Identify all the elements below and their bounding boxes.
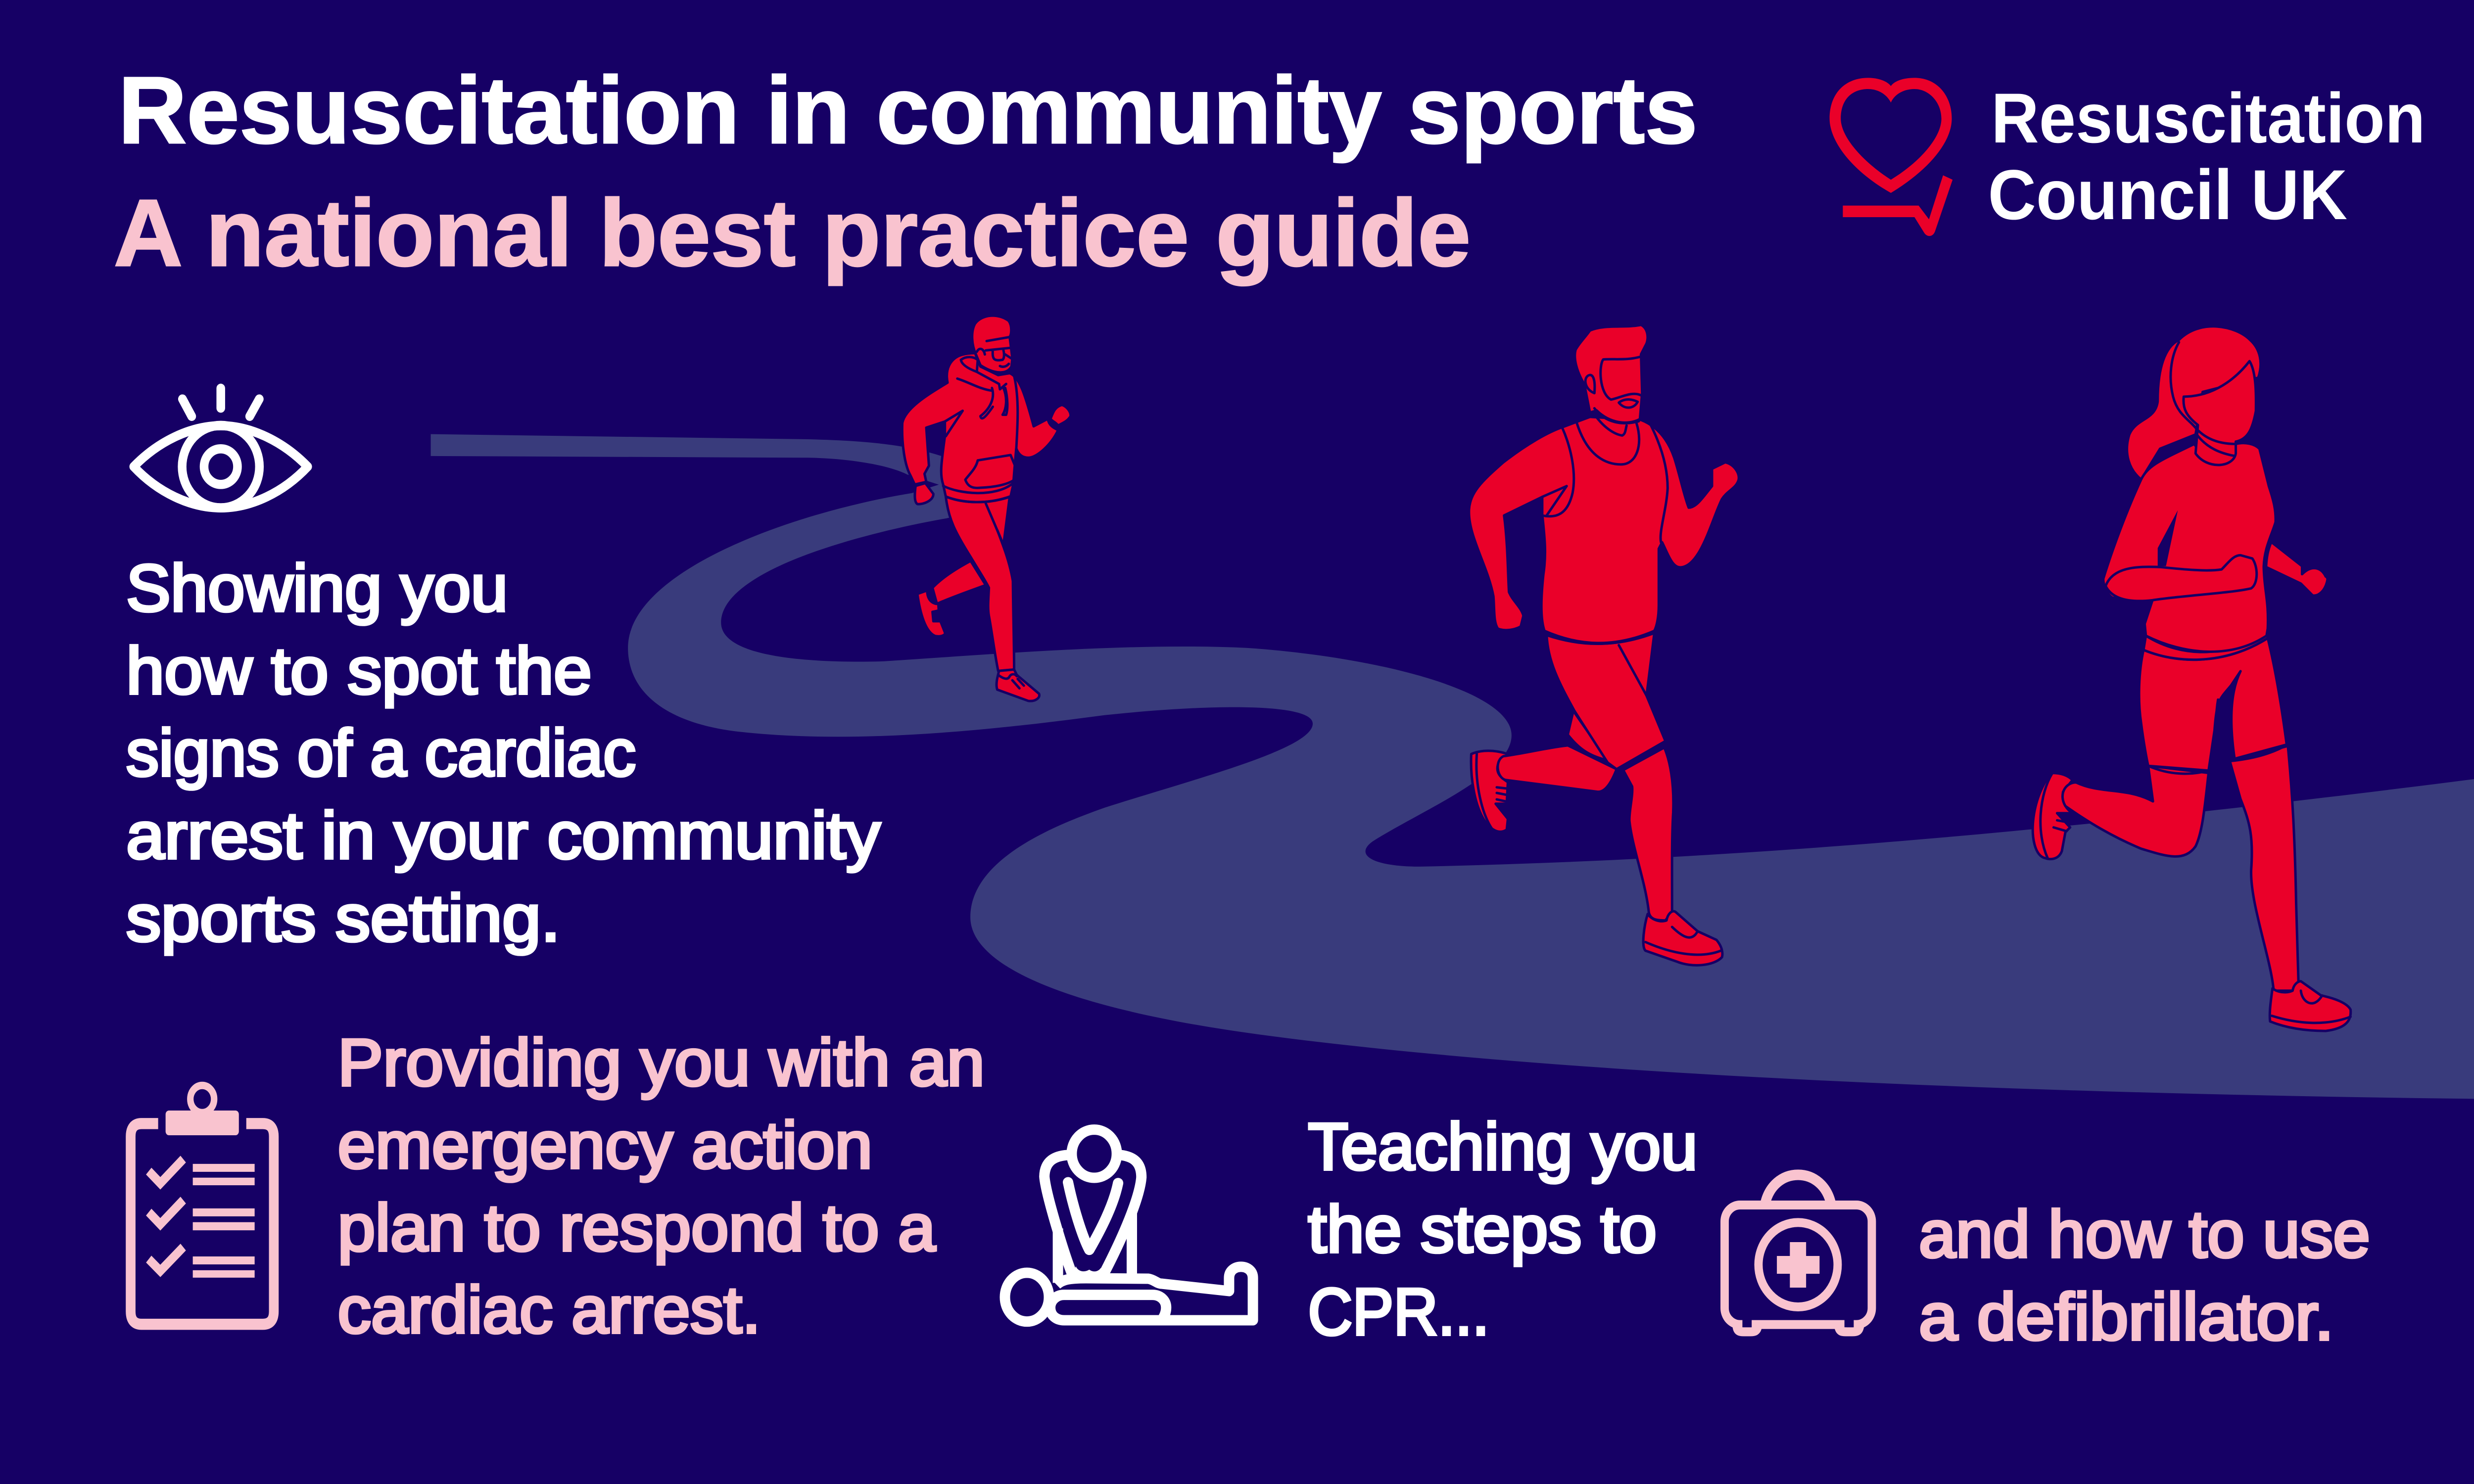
text block: teaching CPR: the steps to <box>1308 1192 1657 1266</box>
icon: clipboard checklist <box>131 1085 274 1324</box>
shorts <box>2139 638 2286 771</box>
underarm gap <box>2158 510 2178 566</box>
text block: emergency action plan: Providing you with an <box>337 1025 985 1100</box>
back shoe <box>1471 751 1508 832</box>
front shoe <box>1643 911 1722 965</box>
text block: spot the signs: how to spot the <box>126 633 592 708</box>
text block: use a defibrillator: and how to use <box>1919 1197 2370 1271</box>
title: Resuscitation in community sports <box>118 58 1698 163</box>
back arm <box>2266 542 2328 596</box>
icon: defibrillator kit <box>1725 1175 1872 1332</box>
icon: CPR <box>1005 1130 1253 1322</box>
front leg <box>2230 746 2298 991</box>
logo: Resuscitation Council UK <box>1830 78 2426 236</box>
runner 1: hoodie and glasses <box>902 316 1071 701</box>
hoodie <box>902 353 1058 502</box>
text block: emergency action plan: plan to respond to a <box>337 1190 936 1265</box>
text block: teaching CPR: CPR... <box>1308 1274 1489 1349</box>
text block: spot the signs: signs of a cardiac <box>126 715 636 790</box>
face <box>2184 361 2256 465</box>
runner 2: man in vest <box>1469 325 1739 965</box>
back leg and shoe <box>917 561 986 636</box>
details <box>1476 356 1721 955</box>
logo wordmark <box>1988 79 2426 234</box>
logo wordmark: Council UK <box>1988 156 2347 234</box>
forearm <box>2106 555 2257 601</box>
back leg <box>2062 766 2209 856</box>
front shoe <box>2270 981 2351 1031</box>
text block: spot the signs: arrest in your community <box>126 798 880 873</box>
title <box>114 58 1698 286</box>
back leg <box>1498 745 1617 792</box>
winding road <box>431 434 2474 1099</box>
top and chest <box>2103 443 2276 651</box>
title: A national best practice guide <box>114 181 1471 286</box>
waistband <box>2143 631 2268 660</box>
text block: emergency action plan <box>337 1025 985 1347</box>
back shoe <box>2033 773 2073 859</box>
head <box>972 316 1012 372</box>
runner 3: woman <box>2033 326 2351 1031</box>
hands <box>915 405 1071 504</box>
text block: use a defibrillator: a defibrillator. <box>1919 1279 2334 1354</box>
head <box>1575 325 1648 422</box>
text block: spot the signs: Showing you <box>126 551 508 625</box>
hair <box>2127 326 2261 479</box>
text block: emergency action plan: emergency action <box>337 1108 872 1182</box>
icon: heart and pulse <box>1830 78 1952 236</box>
details <box>2041 342 2351 1023</box>
text block: spot the signs: sports setting. <box>126 881 560 955</box>
text block: teaching CPR: Teaching you <box>1308 1109 1698 1184</box>
shorts <box>1547 633 1665 769</box>
vest torso and arms <box>1469 417 1739 643</box>
text block: emergency action plan: cardiac arrest. <box>337 1272 761 1347</box>
front leg <box>946 497 1014 671</box>
text block: use a defibrillator <box>1919 1197 2370 1354</box>
front leg <box>1623 747 1673 921</box>
front shoe <box>997 670 1039 701</box>
icon: eye <box>134 388 308 508</box>
logo wordmark: Resuscitation <box>1991 79 2426 158</box>
details <box>927 337 1058 688</box>
text block: teaching CPR <box>1308 1109 1698 1349</box>
text block: spot the signs <box>126 551 880 955</box>
